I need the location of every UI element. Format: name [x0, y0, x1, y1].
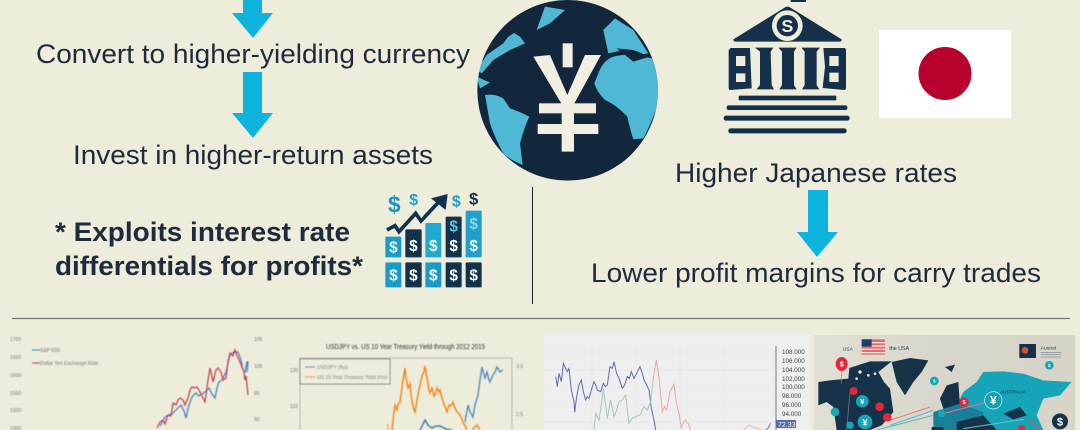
text: carry trade summary: differentials for profits* — [55, 251, 364, 281]
chart: currency price lines: 100.000 — [782, 384, 805, 391]
divider: horizontal — [12, 318, 1070, 320]
chart: S&P 500 vs dollar yen: 95 — [254, 391, 260, 397]
chart: world map of carry trade flows: $ — [840, 360, 844, 369]
divider: vertical — [532, 187, 534, 304]
text: carry trade summary — [55, 217, 364, 281]
chart: world map of carry trade flows: ¥ — [860, 397, 865, 406]
chart: USDJPY vs US 10 year yield: USDJPY (lhs) — [317, 365, 348, 371]
chart: S&P 500 vs dollar yen: Dollar Yen Exchange Rate — [40, 361, 99, 367]
chart: currency price lines: 102.000 — [782, 376, 805, 383]
chart: USDJPY vs US 10 year yield: USDJPY vs. US 10 Year Treasury Yield through 2012 2015 — [326, 344, 485, 351]
chart: world map of carry trade flows: $ — [933, 379, 936, 384]
chart: S&P 500 vs dollar yen: 1700 — [10, 337, 21, 343]
chart: world map of carry trade flows: Austral — [1041, 346, 1056, 352]
chart: S&P 500 vs dollar yen: 1600 — [10, 373, 21, 379]
chart: USDJPY vs US 10 year yield — [290, 344, 523, 430]
icon: rising dollar bars: $ — [429, 238, 438, 255]
chart: currency price lines: 108.000 — [782, 349, 805, 356]
chart: S&P 500 vs dollar yen: 90 — [254, 417, 260, 423]
chart: S&P 500 vs dollar yen: 1500 — [10, 408, 21, 414]
chart: USDJPY vs US 10 year yield: 3.0 — [516, 364, 523, 370]
icon: bank building — [724, 0, 850, 133]
chart: world map of carry trade flows: $ — [1048, 363, 1051, 368]
chart: currency price lines: 104.000 — [782, 367, 805, 374]
chart: world map of carry trade flows: $ — [963, 400, 966, 406]
chart: world map of carry trade flows: USA — [843, 347, 854, 353]
icon: rising dollar bars — [385, 189, 482, 287]
icon: globe with yen symbol — [477, 0, 660, 181]
icon: rising dollar bars: $ — [469, 216, 478, 233]
icon: Japanese flag — [879, 30, 1011, 118]
icon: rising dollar bars: $ — [409, 192, 418, 209]
icon: rising dollar bars: $ — [452, 193, 461, 210]
chart: currency price lines: 106.000 — [782, 358, 805, 365]
icon: rising dollar bars: $ — [429, 267, 438, 284]
chart: world map of carry trade flows: the USA — [889, 346, 910, 352]
icon: rising dollar bars: $ — [449, 238, 458, 255]
arrow: top flow arrow — [232, 0, 273, 38]
text: higher Japanese rates: Higher Japanese rates — [675, 158, 957, 188]
chart: S&P 500 vs dollar yen: S&P 500 — [40, 348, 60, 354]
chart: world map of carry trade flows — [814, 335, 1075, 430]
icon: rising dollar bars: $ — [409, 238, 418, 255]
arrow: rates to margins — [797, 190, 838, 257]
text: lower profit margins: Lower profit margins for carry trades — [591, 258, 1041, 288]
chart: world map of carry trade flows: AUSTRALIA — [1000, 389, 1027, 394]
icon: rising dollar bars: $ — [389, 239, 398, 256]
chart: currency price lines: 72.33 — [778, 422, 796, 429]
chart: world map of carry trade flows: ¥ — [990, 394, 997, 408]
text: convert step: Convert to higher-yielding currency — [36, 39, 471, 69]
icon: bank building: S — [781, 16, 793, 36]
chart: currency price lines: 96.000 — [782, 402, 802, 409]
icon: rising dollar bars: $ — [409, 267, 418, 284]
icon: rising dollar bars: $ — [469, 189, 479, 208]
chart: S&P 500 vs dollar yen — [10, 337, 263, 430]
chart: currency price lines: 98.000 — [782, 393, 802, 400]
chart: S&P 500 vs dollar yen: 1550 — [10, 391, 21, 397]
chart: S&P 500 vs dollar yen: 1650 — [10, 355, 21, 361]
icon: rising dollar bars: $ — [469, 267, 478, 284]
chart: USDJPY vs US 10 year yield: 110 — [290, 404, 298, 410]
chart: world map of carry trade flows: ¥ — [862, 417, 868, 427]
chart: currency price lines: 94.000 — [782, 411, 802, 418]
chart: S&P 500 vs dollar yen: 105 — [254, 337, 263, 343]
icon: rising dollar bars: $ — [469, 238, 478, 255]
text: carry trade summary: * Exploits interest rate — [55, 217, 350, 247]
text: invest step: Invest in higher-return assets — [73, 140, 433, 170]
chart: currency price lines — [544, 334, 810, 430]
icon: rising dollar bars: $ — [449, 219, 458, 236]
chart: USDJPY vs US 10 year yield: 120 — [290, 368, 299, 374]
icon: rising dollar bars: $ — [449, 267, 458, 284]
arrow: convert to invest — [232, 72, 273, 138]
chart: S&P 500 vs dollar yen: 100 — [254, 364, 263, 370]
chart: world map of carry trade flows: $ — [1057, 416, 1064, 428]
icon: rising dollar bars: $ — [388, 192, 401, 218]
chart: USDJPY vs US 10 year yield: 2.5 — [516, 412, 523, 418]
chart: USDJPY vs US 10 year yield: US 10-Year Treasury Yield (rhs) — [317, 375, 388, 381]
icon: rising dollar bars: $ — [389, 267, 398, 284]
